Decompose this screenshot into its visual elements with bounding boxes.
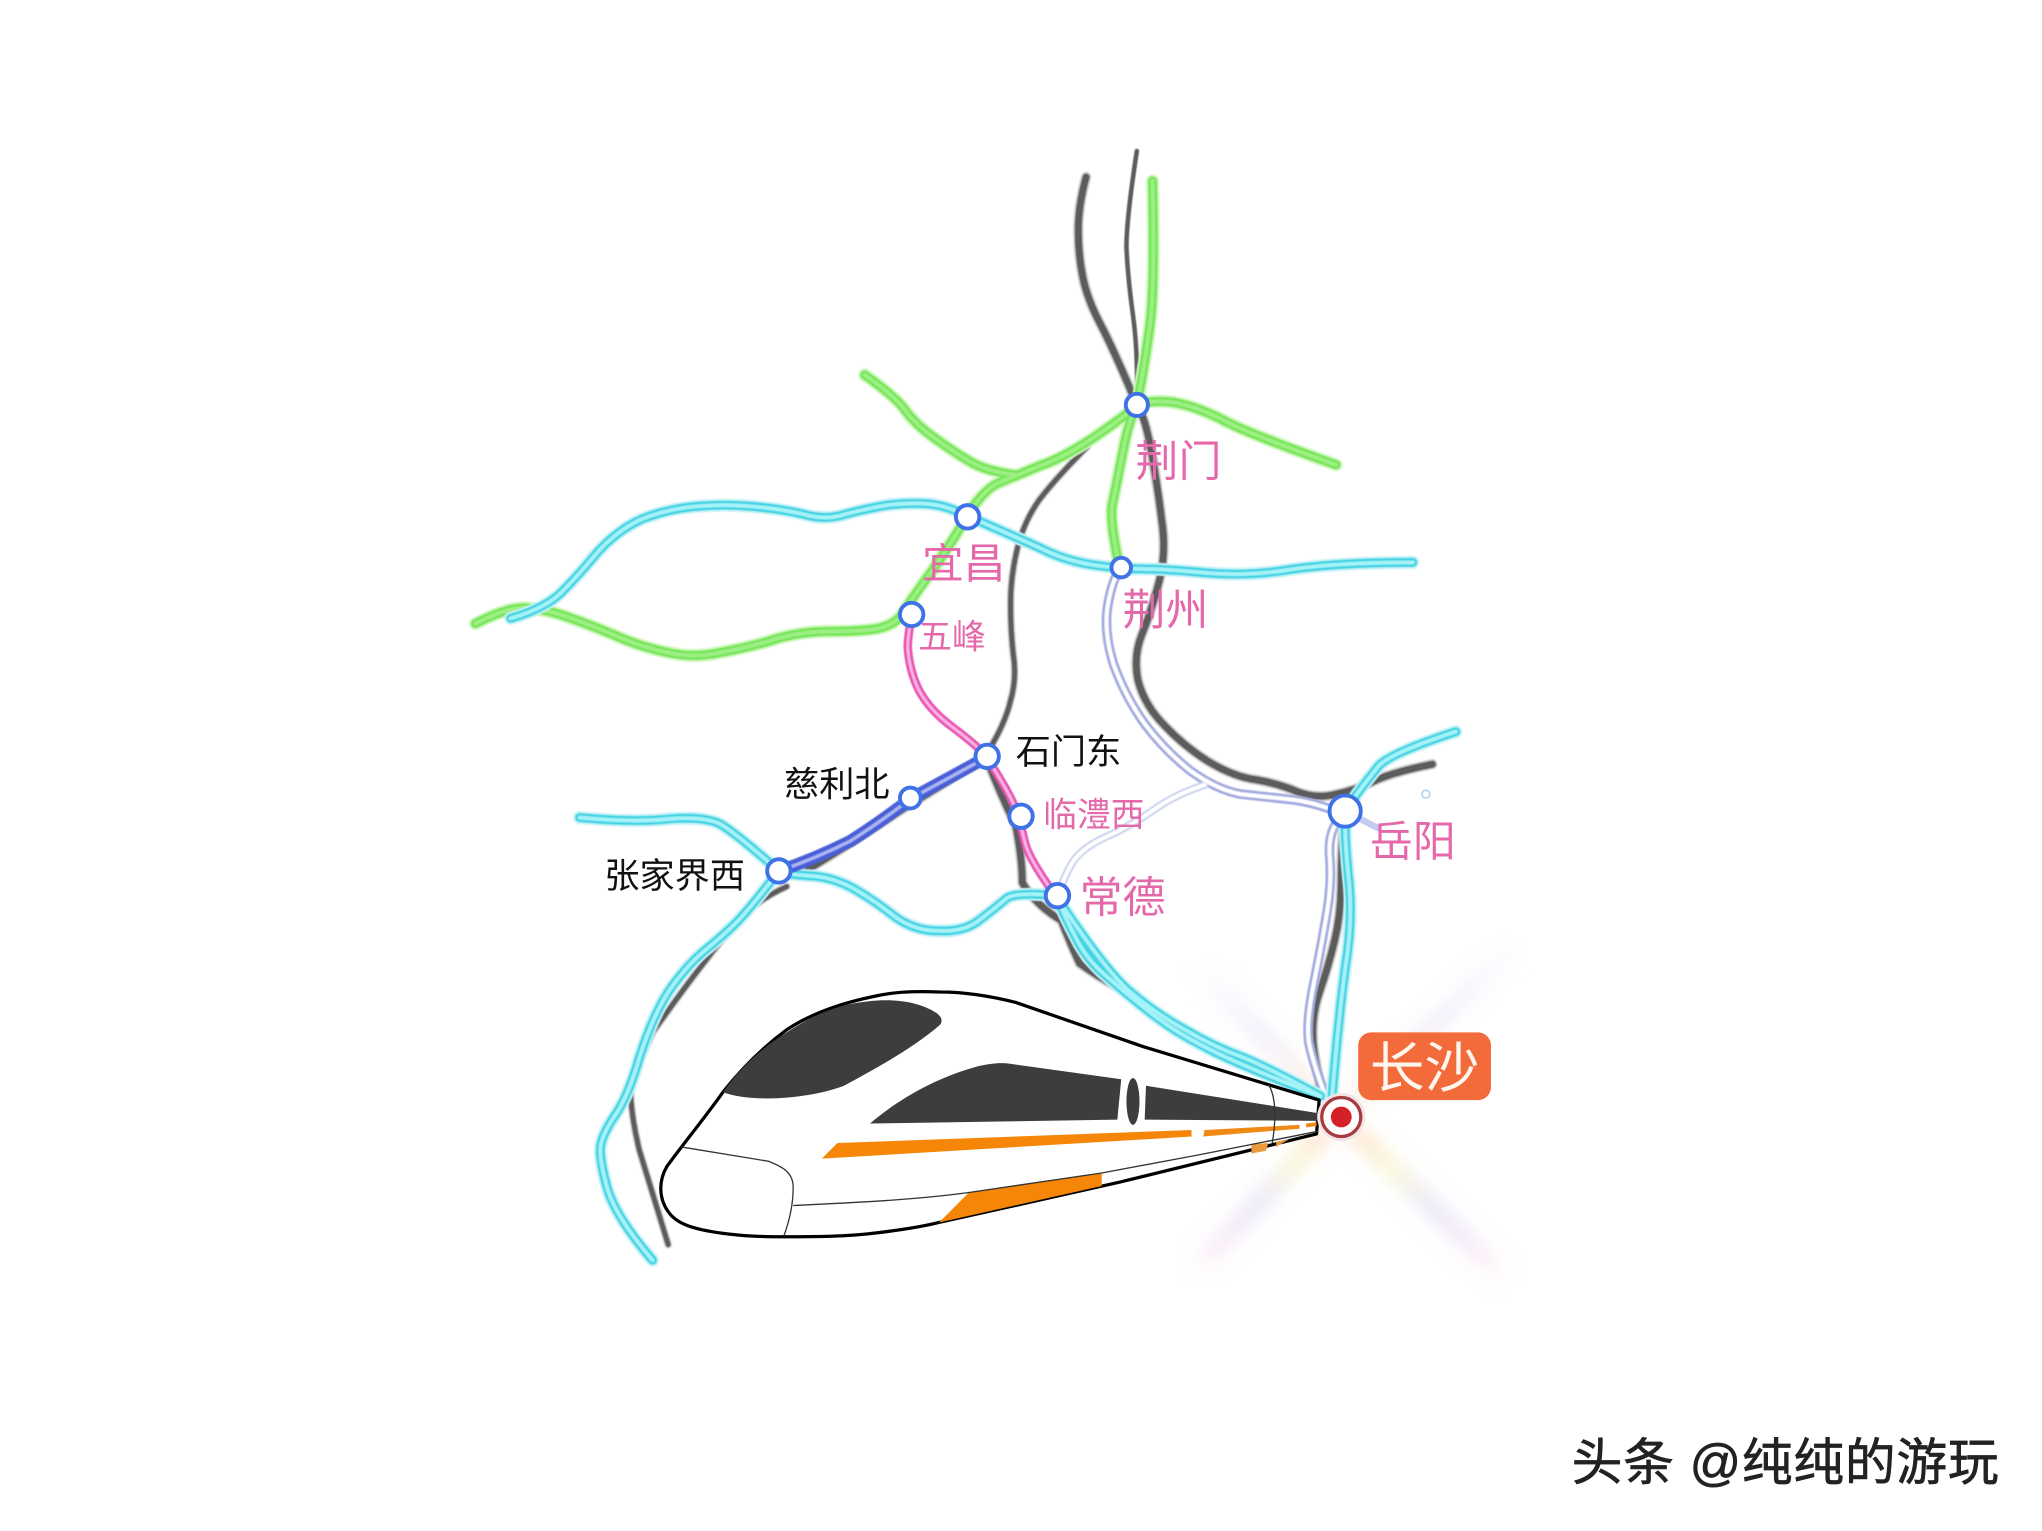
station: 常德 [1046,884,1069,907]
side window front [870,1063,1121,1124]
station markers [767,394,1361,907]
orange stripe rear [1203,1122,1317,1137]
station: 慈利北 [900,788,921,808]
rail lines: gray conventional lines [630,151,1432,1245]
watermark: 头条 @纯纯的游玩 [1572,1434,1999,1491]
station: 临澧西 [1009,805,1033,828]
label: 岳阳: 岳阳 [1370,819,1456,867]
label: 荆州: 荆州 [1123,587,1208,635]
rail lines: cyan network [511,503,1456,1260]
train body [661,992,1319,1237]
station: 石门东 [975,745,999,768]
label: 临澧西: 临澧西 [1043,797,1145,835]
small spot near Yueyang [1422,790,1430,798]
station: 张家界西 [767,859,791,883]
front windshield [723,1000,942,1098]
label: 五峰: 五峰 [918,618,986,656]
high-speed train illustration [661,992,1319,1237]
label: 慈利北: 慈利北 [784,766,889,805]
station: 荆门 [1126,394,1148,416]
rail line: blue Zhangjiajie to Shimen section [779,758,986,871]
label: 石门东: 石门东 [1016,733,1121,772]
short connector east of Yueyang [1345,811,1378,828]
label: 宜昌: 宜昌 [922,540,1005,587]
station: 五峰 [900,603,923,626]
rail lines: green network [476,181,1336,655]
label: 张家界西: 张家界西 [604,857,745,896]
orange stripe main [822,1130,1192,1159]
orange lower stripe [939,1173,1102,1222]
orange lower stripe rear [1251,1139,1289,1153]
starburst glow around Changsha [1205,950,1511,1271]
Changsha label badge: 长沙 [1370,1038,1479,1099]
rail line: pink Yichang to Changde section [908,614,1057,898]
station: 宜昌 [956,505,979,529]
side window rear [1145,1086,1318,1121]
station: 岳阳 [1330,795,1361,827]
station: 荆州 [1111,558,1131,577]
Changsha target marker [1317,1093,1365,1141]
label: 常德: 常德 [1080,875,1165,923]
side window oval [1126,1078,1139,1125]
rail lines: lavender double lines [1057,569,1345,1096]
label: 荆门: 荆门 [1136,438,1221,486]
train contour lines [681,1084,1318,1235]
